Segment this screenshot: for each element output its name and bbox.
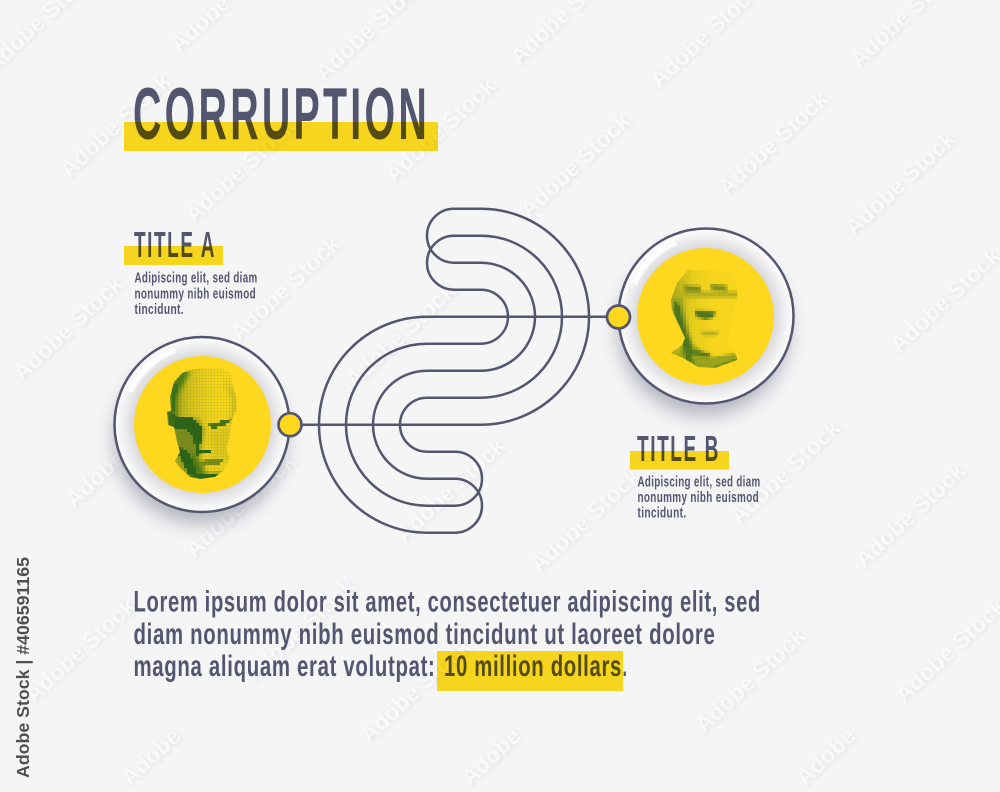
text block: summary paragraph: diam nonummy nibh euismod tincidunt ut laoreet dolore [134,618,716,651]
text: Adobe Stock [840,126,960,240]
title: CORRUPTION: CORRUPTION [133,74,430,155]
text: Adobe Stock [225,231,345,345]
text block: title B description: tincidunt. [638,506,686,522]
text: Adobe Stock [690,623,810,737]
text: Adobe Stock [390,433,510,547]
text: Adobe Stock [380,73,500,187]
text block: title A description: nonummy nibh euismod [134,286,256,302]
text: Adobe Stock [240,573,360,687]
text: Adobe Stock [515,108,635,222]
text block: summary paragraph: . [622,650,628,683]
panel: title B [630,428,760,522]
stock credit, vertical: Adobe Stock | #406591165 [13,557,33,778]
heading: TITLE A: TITLE A [134,224,216,265]
highlight: 10 million dollars [437,651,623,691]
diagram: intertwined connecting lines [301,209,607,533]
text block: summary paragraph [134,586,761,683]
text block: title B description: nonummy nibh euismod [638,490,759,506]
text: Adobe Stock [340,278,460,392]
text: Adobe Stock [180,448,300,562]
text: Adobe Stock [850,458,970,572]
text: Adobe [456,723,526,790]
text block: title A description: tincidunt. [134,302,184,318]
text: Adobe Stock [55,68,175,182]
text block: summary paragraph: magna aliquam erat volutpat: [134,650,436,683]
text block: summary paragraph: 10 million dollars [444,650,622,683]
text block: title B description [638,474,760,522]
heading: TITLE B: TITLE B [637,428,720,469]
text block: title B description: Adipiscing elit, sed diam [638,474,760,490]
text: Adobe Stock [20,593,140,707]
node: left connector [278,413,302,436]
title: CORRUPTION [124,74,438,155]
panel: title A [124,224,258,318]
text: Adobe Stock [180,113,300,227]
text: Adobe Stock [8,271,128,385]
text: Adobe [116,723,186,790]
text: Adobe Stock [713,86,833,200]
text block: title A description: Adipiscing elit, sed diam [134,270,258,286]
text: Adobe Stock [725,415,845,529]
icon: male head, right [671,270,738,368]
icon: bald male head, left [167,368,237,479]
text block: title A description [134,270,258,318]
node: right connector [607,306,630,328]
panel: right portrait badge [618,228,794,416]
text: Adobe Stock [525,463,645,577]
text: Adobe Stock [60,398,180,512]
text: Adobe Stock [355,633,475,747]
text: Adobe [791,723,861,790]
panel: left portrait badge [114,337,290,524]
